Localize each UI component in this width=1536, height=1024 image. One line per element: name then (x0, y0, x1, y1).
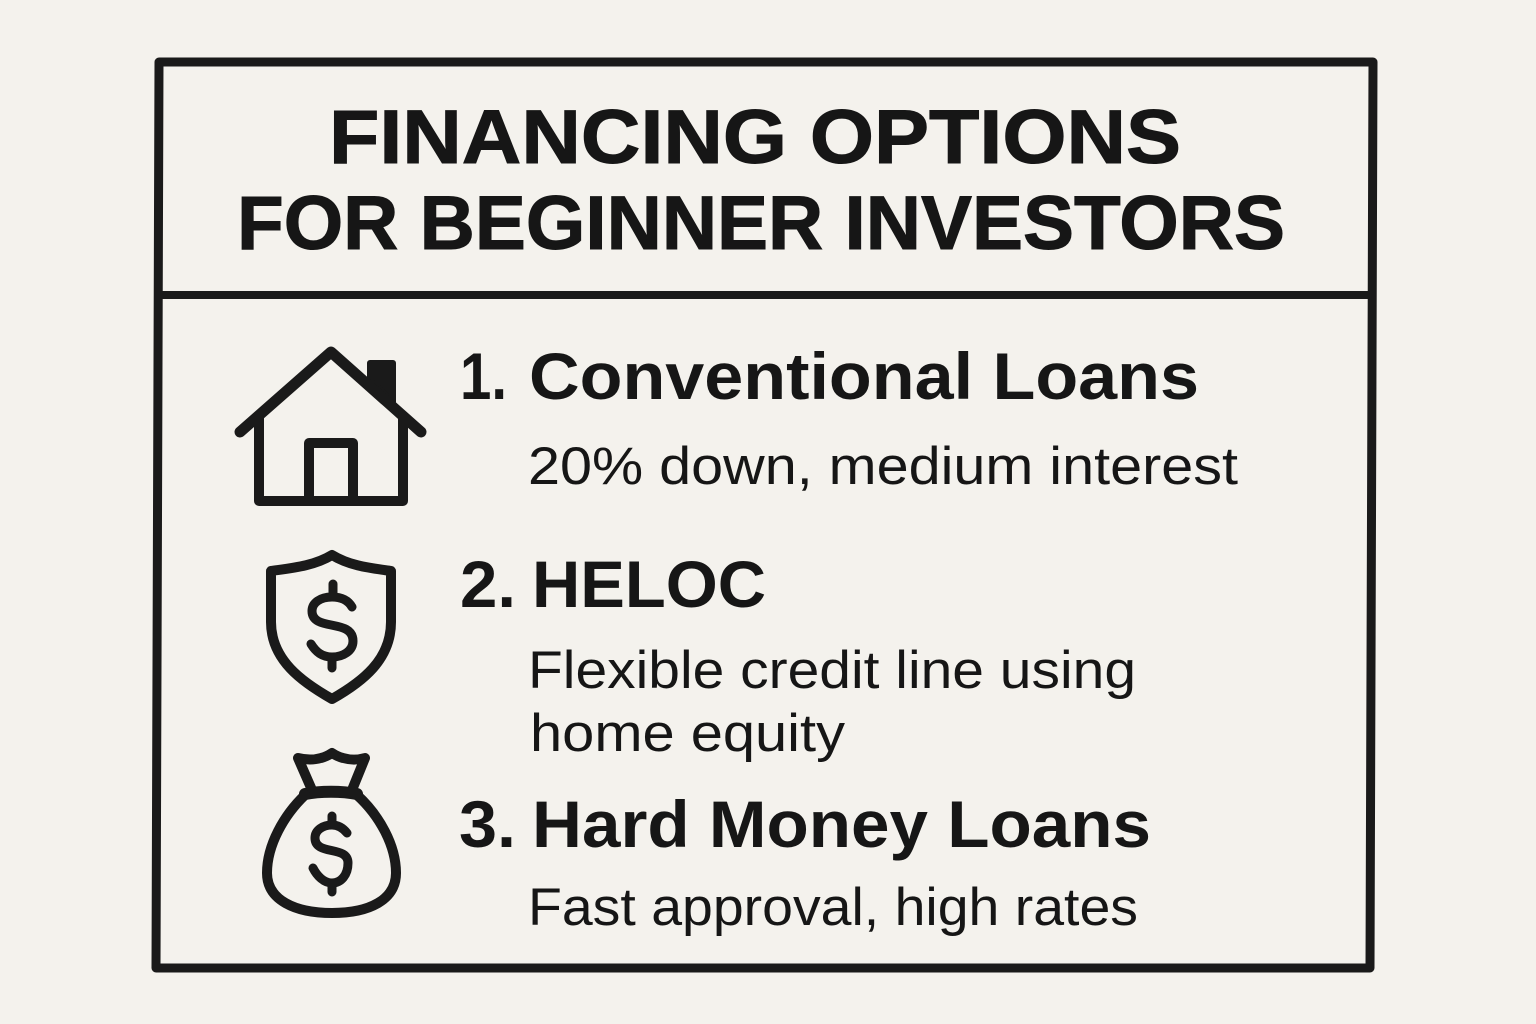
item 2: heloc: 2. (460, 547, 516, 621)
title: FINANCING OPTIONS (329, 95, 1181, 180)
item 2: heloc: home equity (530, 704, 846, 763)
item 3: hard money loans: 3. (459, 787, 516, 861)
item 2: heloc: Flexible credit line using (528, 641, 1136, 700)
panel: main frame (156, 62, 1373, 968)
item 1: conventional loans (460, 339, 1238, 496)
icon: money bag (267, 753, 396, 913)
item 1: conventional loans: 1. (460, 339, 507, 413)
icon: house (240, 352, 421, 501)
item 3: hard money loans: Fast approval, high rates (528, 878, 1138, 937)
item 3: hard money loans: Hard Money Loans (532, 787, 1151, 861)
title (237, 95, 1285, 266)
title: FOR BEGINNER INVESTORS (237, 181, 1285, 266)
icon: shield with dollar (271, 555, 391, 699)
item 1: conventional loans: 20% down, medium interest (528, 437, 1238, 496)
item 1: conventional loans: Conventional Loans (529, 339, 1199, 413)
item 2: heloc: HELOC (532, 547, 766, 621)
item 3: hard money loans (459, 787, 1151, 937)
item 2: heloc (460, 547, 1136, 763)
